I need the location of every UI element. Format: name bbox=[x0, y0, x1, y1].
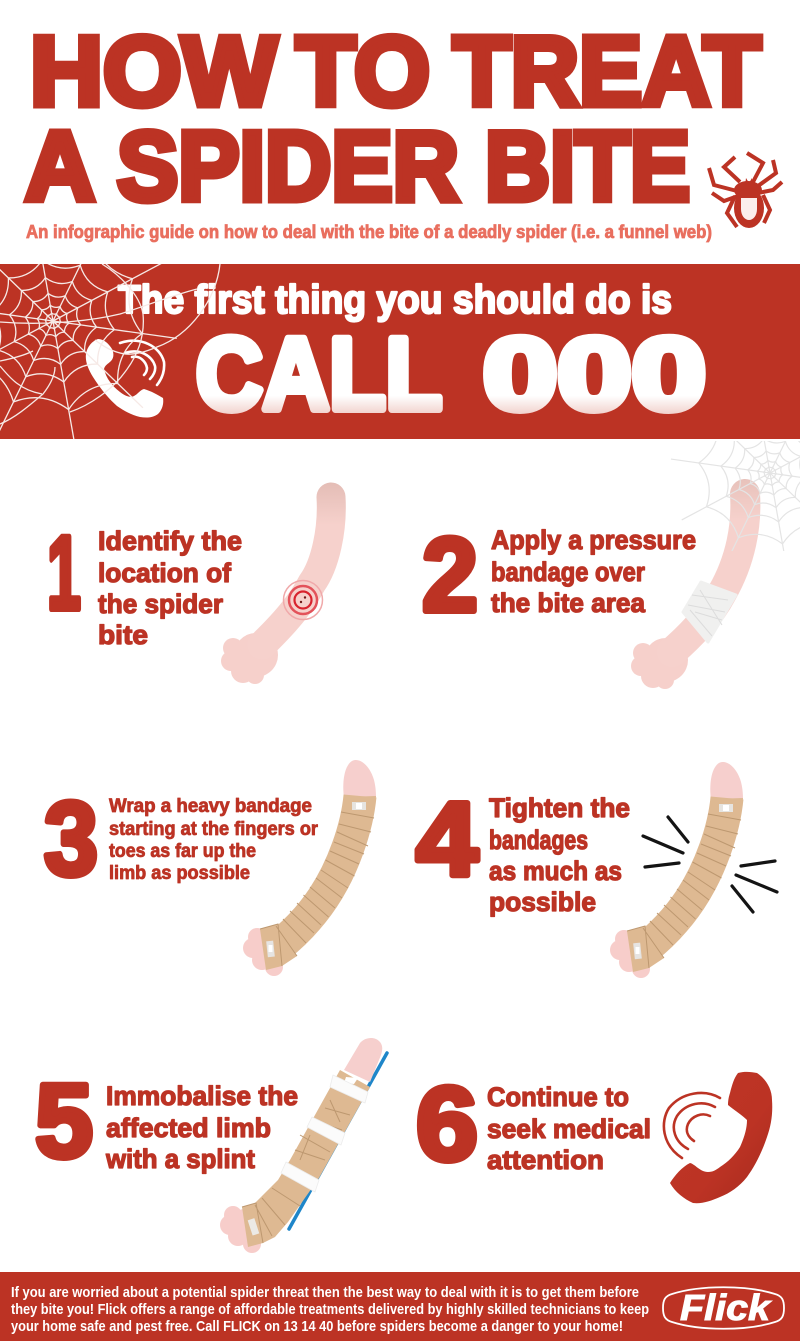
decorative spider web bbox=[671, 441, 800, 551]
icon: tightening tick marks bbox=[643, 817, 777, 912]
step 2 bbox=[422, 441, 800, 689]
heading: call 000: CALL bbox=[196, 317, 442, 431]
step 3 bbox=[44, 760, 376, 976]
illustration: fully bandaged arm bbox=[243, 760, 376, 976]
footer text: your home safe and pest free. Call FLICK on 13 14 40 before spiders become a danger to your home! bbox=[11, 1318, 623, 1335]
text step 5 bbox=[105, 1081, 298, 1174]
heading: call 000 bbox=[196, 317, 706, 431]
footer text: If you are worried about a potential spider threat then the best way to deal with it is to get them before bbox=[11, 1284, 639, 1301]
text step 4: possible bbox=[489, 887, 596, 917]
title: HOW bbox=[30, 16, 278, 126]
text step 3: Wrap a heavy bandage bbox=[109, 796, 312, 817]
text step 1: the spider bbox=[98, 589, 223, 619]
step 4 bbox=[416, 762, 777, 978]
text step 2: the bite area bbox=[491, 588, 646, 618]
text step 3: limb as possible bbox=[109, 863, 250, 884]
footer text: they bite you! Flick offers a range of affordable treatments delivered by highly skilled technicians to keep bbox=[11, 1301, 649, 1318]
title bbox=[25, 16, 761, 221]
text step 1: bite bbox=[98, 620, 148, 650]
subtitle: An infographic guide on how to deal with the bite of a deadly spider (i.e. a funnel web) bbox=[26, 222, 712, 242]
text step 1: Identify the bbox=[98, 526, 242, 556]
text step 6 bbox=[487, 1082, 651, 1175]
panel: call 000 banner bbox=[0, 264, 800, 439]
text step 4: as much as bbox=[489, 856, 622, 886]
illustration: tightened bandaged arm bbox=[610, 762, 743, 978]
text step 5: Immobalise the bbox=[106, 1081, 298, 1111]
text step 4 bbox=[489, 793, 630, 917]
text step 6: Continue to bbox=[487, 1082, 629, 1112]
icon: white telephone bbox=[86, 339, 164, 418]
number 6: 6 bbox=[416, 1066, 478, 1183]
splint straps bbox=[281, 1075, 368, 1192]
text step 6: seek medical bbox=[487, 1114, 651, 1144]
text step 3: toes as far up the bbox=[109, 841, 256, 862]
title: BITE bbox=[485, 111, 690, 221]
heading: first thing: The first thing you should do is bbox=[118, 278, 672, 322]
illustration: arm with pressure bandage bbox=[631, 494, 745, 689]
logo: Flick bbox=[663, 1287, 784, 1329]
title: A bbox=[25, 111, 95, 221]
panel: footer bbox=[0, 1272, 800, 1341]
title: TO bbox=[296, 16, 430, 126]
decorative spider web bbox=[0, 264, 221, 439]
text step 1 bbox=[98, 526, 242, 650]
pressure bandage bbox=[683, 582, 736, 642]
text step 4: bandages bbox=[489, 825, 588, 855]
splint bbox=[289, 1053, 387, 1229]
bite marker bbox=[284, 580, 322, 620]
text step 2: Apply a pressure bbox=[491, 525, 696, 555]
icon: spider bbox=[709, 153, 782, 228]
step 1 bbox=[47, 497, 331, 684]
footer text bbox=[11, 1284, 649, 1335]
logo: Flick: Flick bbox=[680, 1287, 772, 1328]
icon: red telephone bbox=[664, 1072, 772, 1203]
number 3: 3 bbox=[44, 781, 98, 898]
title: TREAT bbox=[453, 16, 761, 126]
number 5: 5 bbox=[35, 1063, 93, 1180]
text step 2: bandage over bbox=[491, 557, 645, 587]
title: SPIDER bbox=[117, 111, 459, 221]
heading: call 000: 000 bbox=[483, 317, 706, 431]
step 6 bbox=[416, 1066, 772, 1203]
illustration: arm with bite bbox=[221, 497, 331, 684]
text step 5: affected limb bbox=[106, 1113, 271, 1143]
illustration: arm with splint bbox=[220, 1038, 387, 1253]
text step 1: location of bbox=[98, 558, 232, 588]
number 4: 4 bbox=[416, 781, 478, 898]
text step 3 bbox=[109, 796, 319, 884]
step 5 bbox=[35, 1038, 387, 1253]
text step 4: Tighten the bbox=[489, 793, 630, 823]
text step 2 bbox=[491, 525, 696, 618]
text step 6: attention bbox=[487, 1145, 604, 1175]
text step 3: starting at the fingers or bbox=[109, 819, 319, 840]
number 2: 2 bbox=[422, 517, 478, 634]
number 1: 1 bbox=[47, 515, 81, 632]
text step 5: with a splint bbox=[105, 1144, 255, 1174]
